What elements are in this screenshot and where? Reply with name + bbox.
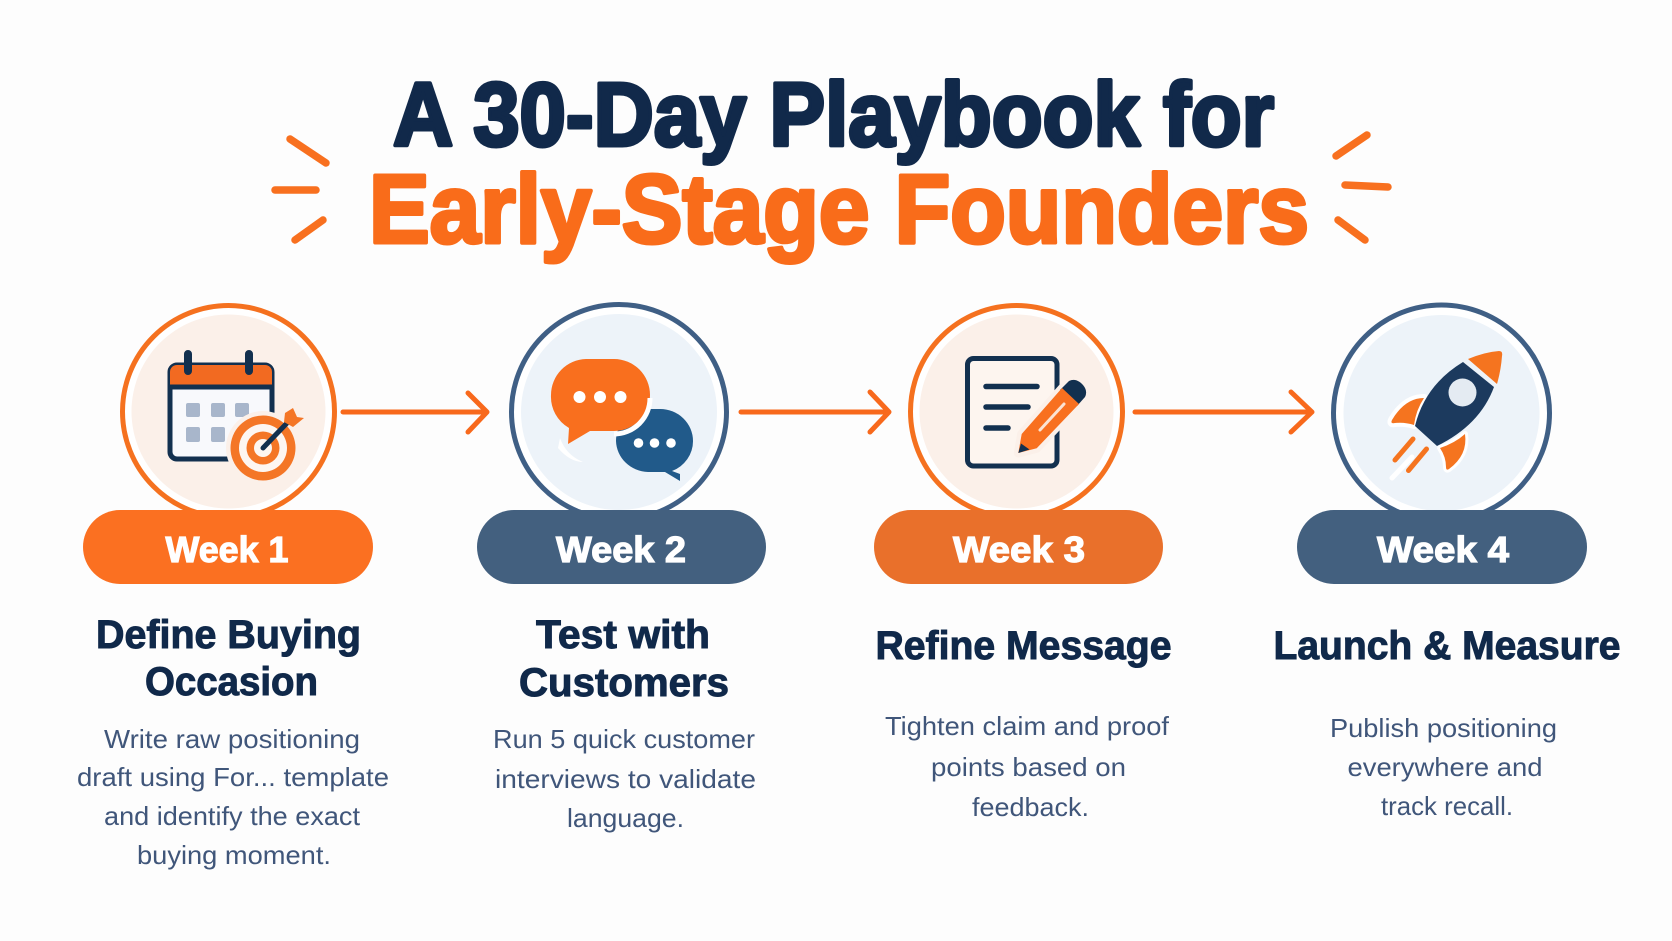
icon circle: week 4 [1334, 305, 1550, 521]
pill: week 2: Week 2 [556, 529, 686, 570]
heading: week 3: Refine Message [876, 624, 1172, 668]
pill: week 4: Week 4 [1377, 529, 1509, 570]
icon: chat bubbles [551, 359, 693, 481]
body text: week 3: Tighten claim and proof [885, 711, 1170, 741]
pill: week 1 [83, 510, 373, 584]
body text: week 2: language. [567, 803, 684, 833]
title: Early-Stage Founders [369, 154, 1309, 264]
heading: week 4: Launch & Measure [1274, 624, 1620, 668]
icon: calendar with target [170, 354, 304, 485]
body text: week 1: Write raw positioning [104, 724, 360, 754]
icon: document and pencil [968, 358, 1086, 466]
pill: week 1: Week 1 [166, 529, 288, 570]
body text: week 2: interviews to validate [495, 764, 756, 794]
body text: week 4 [1330, 713, 1557, 821]
heading: week 1: Define Buying [96, 613, 361, 657]
pill: week 2 [477, 510, 766, 584]
heading: week 1 [96, 613, 361, 704]
body text: week 4: everywhere and [1348, 752, 1542, 782]
body text: week 2 [493, 724, 756, 833]
body text: week 3 [885, 711, 1170, 822]
body text: week 1: and identify the exact [104, 801, 361, 831]
body text: week 4: track recall. [1381, 791, 1513, 821]
body text: week 3: feedback. [972, 792, 1089, 822]
arrow: week 2 to week 3 [741, 392, 889, 432]
body text: week 1: draft using For... template [77, 762, 389, 792]
pill: week 4 [1297, 510, 1587, 584]
body text: week 4: Publish positioning [1330, 713, 1557, 743]
heading: week 2: Customers [519, 661, 729, 705]
burst marks: left [275, 139, 326, 240]
icon: rocket [1391, 351, 1502, 478]
burst marks: right [1336, 135, 1388, 240]
body text: week 1 [77, 724, 389, 870]
title [369, 66, 1309, 264]
body text: week 2: Run 5 quick customer [493, 724, 755, 754]
panel: week 4 [1274, 305, 1620, 821]
arrow: week 1 to week 2 [343, 393, 487, 432]
panel: week 3 [874, 306, 1172, 822]
icon circle: week 2 [512, 304, 726, 520]
panel: week 1 [77, 306, 389, 870]
body text: week 3: points based on [931, 752, 1126, 782]
icon circle: week 1 [122, 306, 334, 518]
heading: week 2: Test with [536, 613, 710, 657]
pill: week 3 [874, 510, 1163, 584]
title: A 30-Day Playbook for [393, 66, 1274, 166]
body text: week 1: buying moment. [137, 840, 331, 870]
pill: week 3: Week 3 [953, 529, 1085, 570]
panel: week 2 [477, 304, 766, 833]
icon circle: week 3 [910, 306, 1122, 518]
heading: week 1: Occasion [145, 660, 318, 704]
heading: week 2 [519, 613, 729, 705]
arrow: week 3 to week 4 [1135, 392, 1312, 432]
